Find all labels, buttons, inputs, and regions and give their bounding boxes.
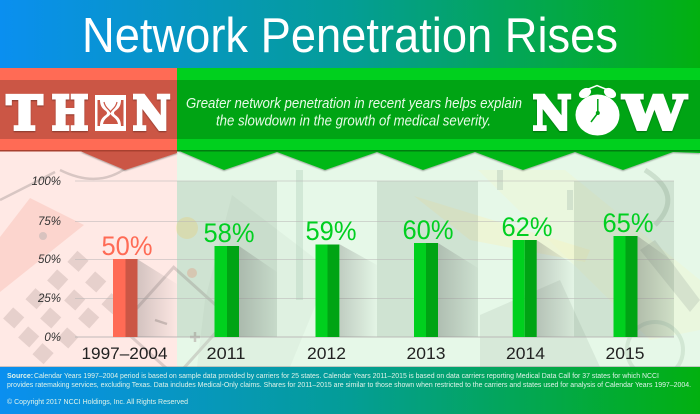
now wordmark: W [622, 86, 687, 142]
description text: Greater network penetration in recent years helps explain [186, 95, 522, 112]
bar: 2015: 65% [602, 208, 654, 238]
x axis labels: 1997–2004 [82, 344, 168, 363]
y axis labels: 75% [38, 216, 61, 228]
bar: 2012: 59% [306, 216, 356, 246]
x axis labels: 2011 [206, 344, 246, 363]
bar: 2015 [602, 208, 674, 337]
chart gridlines [75, 181, 674, 337]
source note: provides ratemaking services, excluding Texas. Data includes Medical-Only claims. Shares for 2011–2015 are similar to those shown when restricted to the carriers and states used for analysis of Calendar Years 1997–2004. [7, 382, 691, 389]
decoration: desk items [176, 170, 700, 378]
bar: 2013 [402, 215, 478, 337]
decoration: calculator and price tag [0, 169, 214, 367]
source note: Source: [7, 373, 33, 380]
then wordmark [6, 86, 170, 142]
bar: 2011 [204, 218, 277, 337]
description text: the slowdown in the growth of medical severity. [216, 112, 491, 130]
panel: now banner [177, 68, 700, 170]
source note: Calendar Years 1997–2004 period is based on sample data provided by carriers for 25 states. Calendar Years 2011–2015 is based on data carriers reporting Medical Data Call for 37 states for which NCCI [34, 373, 659, 380]
bar: 2011: 58% [204, 218, 254, 248]
background [0, 152, 700, 367]
bar: 2014: 62% [502, 212, 552, 242]
x axis labels [82, 344, 644, 363]
source note [7, 373, 691, 389]
title banner: Network Penetration Rises [82, 9, 618, 63]
x axis labels: 2014 [506, 344, 545, 363]
bar: 2014 [502, 212, 574, 337]
bar: 2012 [306, 216, 377, 337]
bar: 1997–2004 [102, 231, 177, 337]
bar: 1997–2004: 50% [102, 231, 152, 261]
now wordmark: N [532, 86, 572, 142]
x axis labels: 2013 [406, 344, 446, 363]
now wordmark [532, 86, 687, 142]
footer [0, 366, 700, 414]
y axis labels: 50% [38, 254, 61, 266]
copyright: © Copyright 2017 NCCI Holdings, Inc. All Rights Reserved [7, 398, 188, 406]
x axis labels: 2015 [606, 344, 644, 363]
icon: alarm clock [576, 86, 620, 136]
then wordmark: N [132, 86, 170, 142]
then wordmark: T [6, 86, 43, 142]
icon: hourglass [95, 95, 126, 131]
title banner [0, 0, 700, 68]
y axis labels: 0% [44, 332, 61, 344]
y axis labels: 100% [32, 176, 61, 188]
bar: 2013: 60% [402, 215, 454, 245]
panel: then banner [0, 68, 177, 170]
y axis labels [32, 176, 61, 344]
then wordmark: H [52, 86, 88, 142]
x axis labels: 2012 [307, 344, 346, 363]
chart column bands [177, 181, 674, 337]
y axis labels: 25% [37, 293, 61, 305]
description text [186, 95, 522, 130]
